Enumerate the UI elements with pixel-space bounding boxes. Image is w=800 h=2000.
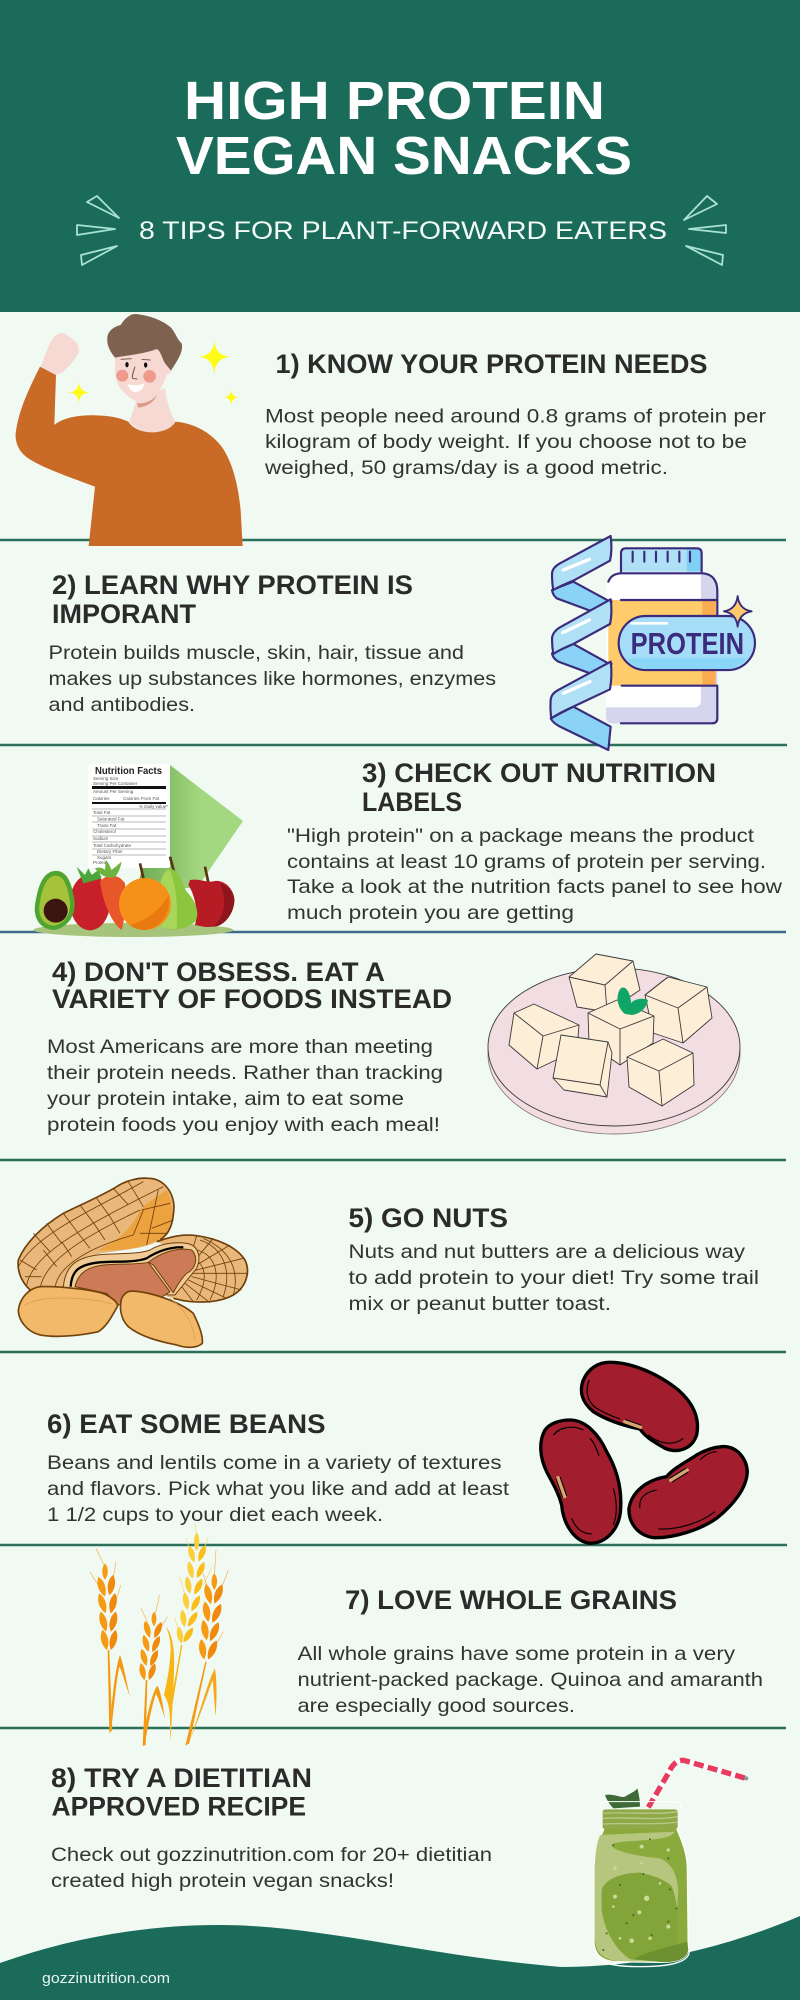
- subtitle: 8 TIPS FOR PLANT-FORWARD EATERS: [139, 217, 667, 245]
- text: tip 2 body: and antibodies.: [48, 694, 195, 716]
- heading: tip 3: [362, 758, 716, 817]
- panel: tip 6: [47, 1362, 747, 1543]
- icon: tofu plate: [488, 954, 740, 1134]
- text: tip 8 body: [51, 1844, 492, 1892]
- text: tip 3 body: contains at least 10 grams of protein per serving.: [287, 851, 766, 873]
- heading: tip 6: 6) EAT SOME BEANS: [47, 1409, 326, 1439]
- icon: green smoothie jar: [594, 1760, 748, 1967]
- heading: tip 8: [51, 1763, 312, 1822]
- text: tip 7 body: nutrient-packed package. Quinoa and amaranth: [298, 1669, 763, 1691]
- panel: tip 7: [90, 1523, 763, 1746]
- icon: nutrition label and fruit: Cholesterol: [93, 829, 116, 834]
- icon: kidney beans: [541, 1362, 747, 1543]
- text: tip 3 body: "High protein" on a package means the product: [287, 825, 755, 847]
- icon: nutrition label and fruit: Saturated Fat: [97, 816, 125, 822]
- icon: wheat stalks: [90, 1523, 228, 1746]
- icon: right burst: [684, 196, 726, 265]
- text: tip 4 body: their protein needs. Rather than tracking: [47, 1062, 443, 1084]
- heading: tip 1: 1) KNOW YOUR PROTEIN NEEDS: [276, 349, 708, 379]
- text: tip 7 body: [298, 1643, 763, 1717]
- text: tip 7 body: All whole grains have some protein in a very: [298, 1643, 735, 1665]
- icon: nutrition label and fruit: Serving Size: [93, 776, 119, 781]
- panel: tip 8: [51, 1760, 748, 1967]
- text: tip 6 body: 1 1/2 cups to your diet each week.: [47, 1504, 383, 1526]
- heading: tip 8: APPROVED RECIPE: [52, 1792, 306, 1822]
- text: tip 5 body: mix or peanut butter toast.: [348, 1293, 611, 1315]
- heading: tip 3: LABELS: [362, 787, 462, 817]
- title: VEGAN SNACKS: [176, 126, 632, 186]
- heading: tip 4: VARIETY OF FOODS INSTEAD: [52, 984, 452, 1014]
- heading: tip 4: [52, 957, 452, 1014]
- text: tip 5 body: to add protein to your diet! Try some trail: [348, 1267, 759, 1289]
- icon: nutrition label and fruit: Sodium: [93, 836, 109, 841]
- text: tip 8 body: created high protein vegan snacks!: [51, 1870, 394, 1892]
- text: tip 4 body: protein foods you enjoy with each meal!: [47, 1114, 440, 1136]
- footer link text: gozzinutrition.com: [42, 1970, 170, 1987]
- text: tip 1 body: weighed, 50 grams/day is a good metric.: [264, 457, 668, 479]
- icon: protein bottle with helix: [550, 536, 755, 750]
- icon: nutrition label and fruit: Calories: [93, 796, 110, 801]
- icon: nutrition label and fruit: Amount Per Serving: [93, 789, 134, 794]
- text: tip 2 body: makes up substances like hormones, enzymes: [48, 668, 496, 690]
- text: tip 4 body: [47, 1036, 443, 1136]
- text: tip 3 body: [287, 825, 783, 924]
- text: tip 6 body: Beans and lentils come in a variety of textures: [47, 1452, 502, 1474]
- title: HIGH PROTEIN: [184, 71, 605, 131]
- panel: tip 2: [48, 536, 755, 750]
- text: tip 4 body: your protein intake, aim to eat some: [47, 1088, 404, 1110]
- icon: nutrition label and fruit: Calories From Fat: [123, 796, 160, 801]
- text: tip 8 body: Check out gozzinutrition.com for 20+ dietitian: [51, 1844, 492, 1866]
- panel: tip 3: [33, 758, 783, 937]
- text: tip 1 body: Most people need around 0.8 grams of protein per: [265, 406, 767, 428]
- icon: nutrition label and fruit: Nutrition Facts: [95, 765, 162, 777]
- icon: nutrition label and fruit: Serving Per Container: [93, 781, 138, 786]
- text: tip 6 body: and flavors. Pick what you like and add at least: [47, 1478, 510, 1500]
- text: tip 2 body: [48, 642, 496, 716]
- text: tip 4 body: Most Americans are more than meeting: [47, 1036, 433, 1058]
- heading: tip 8: 8) TRY A DIETITIAN: [51, 1763, 312, 1793]
- icon: nutrition label and fruit: Protein: [93, 860, 108, 865]
- text: tip 1 body: kilogram of body weight. If you choose not to be: [265, 431, 747, 453]
- panel: tip 1: [16, 314, 767, 546]
- footer wave: [0, 1916, 800, 2000]
- heading: tip 2: [52, 570, 413, 629]
- heading: tip 7: 7) LOVE WHOLE GRAINS: [345, 1585, 677, 1615]
- icon: nutrition label and fruit: Total Fat: [93, 810, 111, 815]
- icon: nutrition label and fruit: Dietary Fiber: [97, 849, 123, 854]
- header banner: [0, 0, 800, 312]
- icon: flexing man: [16, 314, 243, 546]
- icon: left burst: [77, 196, 119, 265]
- text: tip 3 body: much protein you are getting: [287, 902, 574, 924]
- icon: peanuts: [18, 1178, 248, 1347]
- heading: tip 3: 3) CHECK OUT NUTRITION: [362, 758, 716, 788]
- icon: nutrition label and fruit: Trans Fat: [97, 823, 117, 828]
- panel: tip 4: [47, 954, 740, 1136]
- text: tip 5 body: [348, 1241, 759, 1315]
- icon: nutrition label and fruit: % Daily value*: [139, 804, 168, 809]
- text: tip 6 body: [47, 1452, 510, 1526]
- heading: tip 2: IMPORANT: [52, 599, 196, 629]
- icon: nutrition label and fruit: Total Carbohydrate: [93, 843, 132, 848]
- title: [176, 71, 632, 186]
- text: tip 3 body: Take a look at the nutrition facts panel to see how: [287, 876, 783, 898]
- text: tip 7 body: are especially good sources.: [298, 1695, 575, 1717]
- heading: tip 4: 4) DON'T OBSESS. EAT A: [52, 957, 385, 987]
- icon: nutrition label and fruit: [33, 764, 243, 937]
- text: tip 2 body: Protein builds muscle, skin, hair, tissue and: [48, 642, 464, 664]
- heading: tip 5: 5) GO NUTS: [348, 1203, 508, 1233]
- label: PROTEIN: PROTEIN: [631, 627, 744, 661]
- panel: tip 5: [18, 1178, 759, 1347]
- text: tip 1 body: [264, 406, 767, 479]
- icon: nutrition label and fruit: Sugars: [97, 855, 112, 860]
- heading: tip 2: 2) LEARN WHY PROTEIN IS: [52, 570, 413, 600]
- text: tip 5 body: Nuts and nut butters are a delicious way: [348, 1241, 745, 1263]
